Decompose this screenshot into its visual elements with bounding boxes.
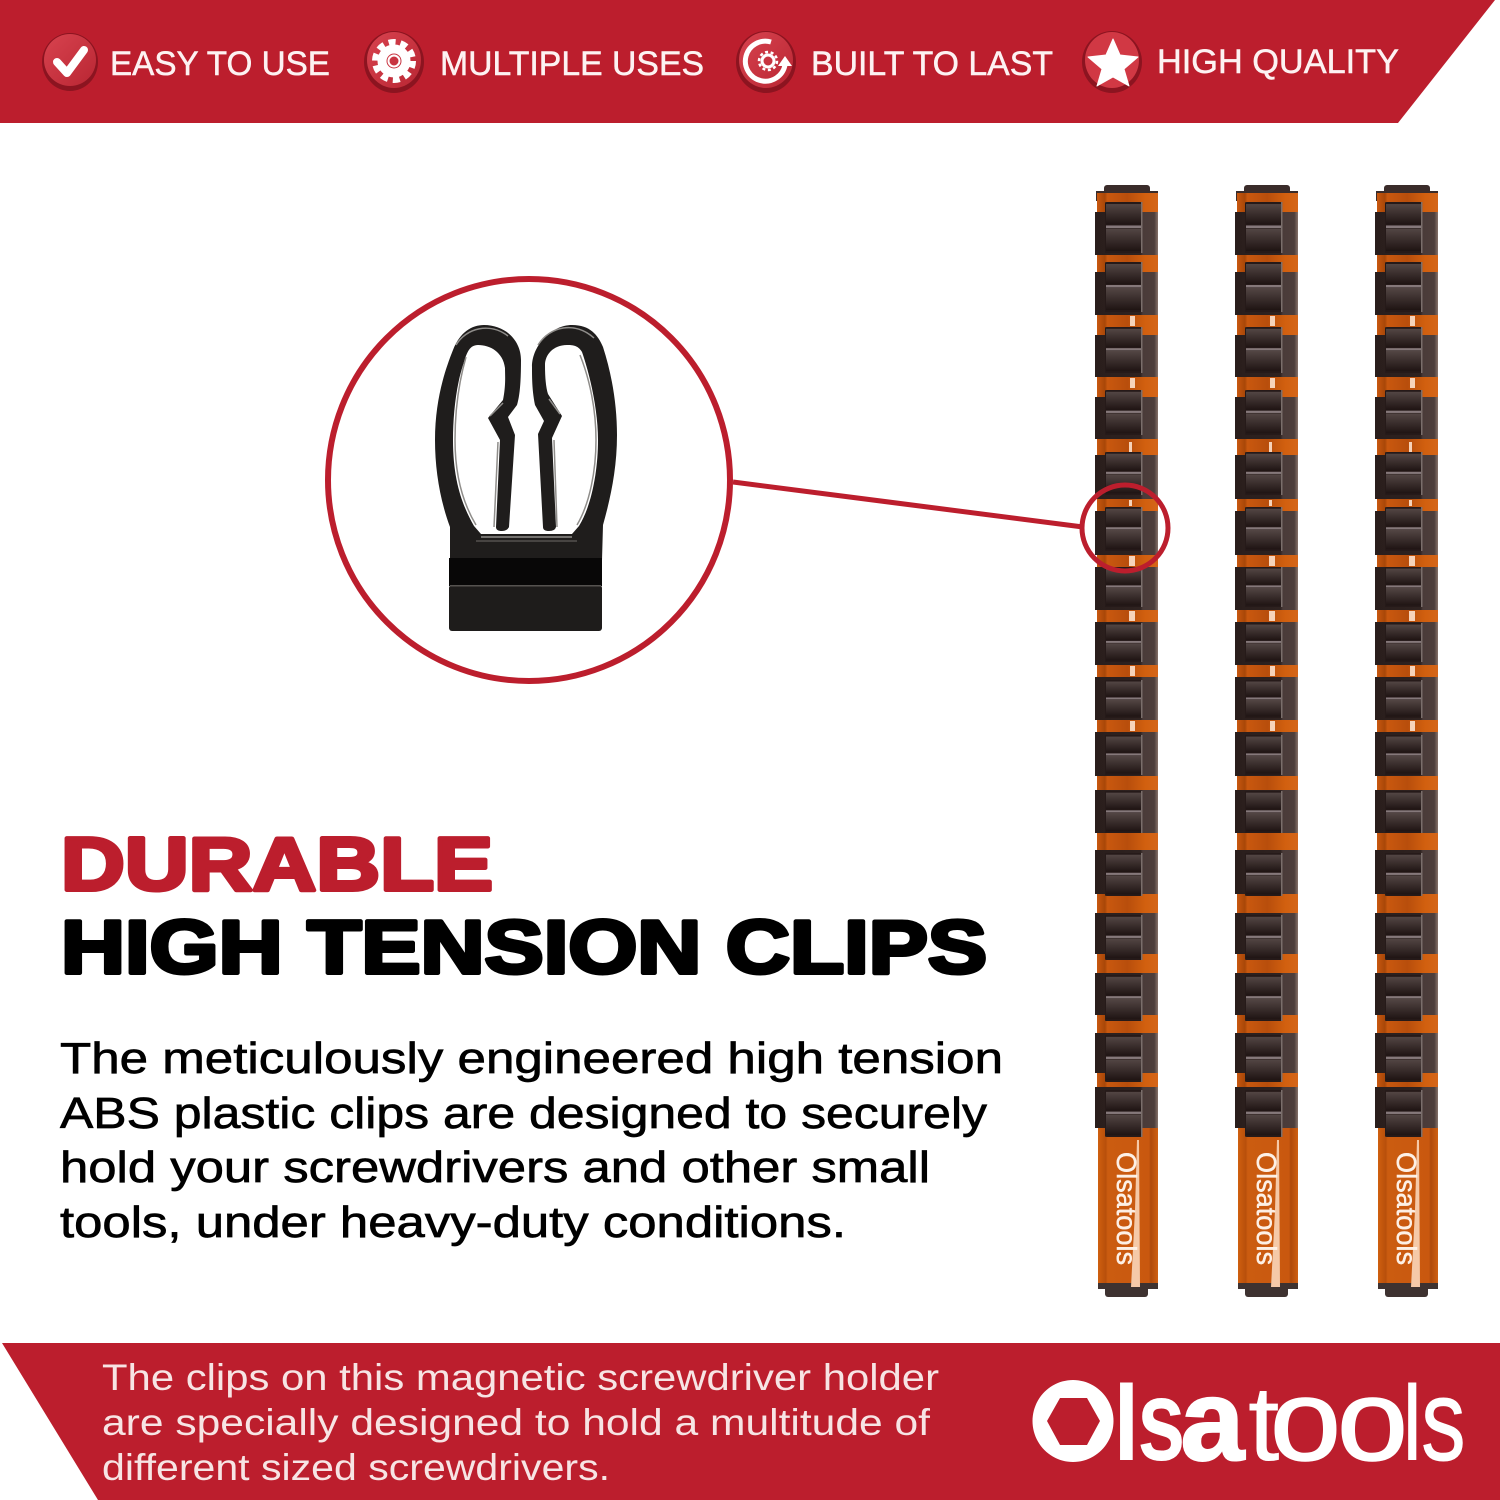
icon: star badge	[1082, 31, 1142, 93]
logo: o	[1337, 1356, 1408, 1485]
top banner	[0, 0, 1495, 123]
label: high quality: HIGH QUALITY	[1157, 43, 1399, 81]
clip close-up callout	[328, 279, 730, 681]
rail brand text: Olsatools	[1251, 1152, 1282, 1265]
bottom banner text: The clips on this magnetic screwdriver holder	[102, 1357, 939, 1398]
label: built to last: BUILT TO LAST	[811, 45, 1053, 83]
icon: black plastic clip	[435, 325, 617, 631]
logo: l	[1114, 1365, 1139, 1484]
rail brand text: Olsatools	[1111, 1152, 1142, 1265]
icon: cycle gear badge	[736, 31, 796, 93]
connector line	[733, 482, 1083, 527]
body text: hold your screwdrivers and other small	[60, 1143, 930, 1192]
label: multiple uses: MULTIPLE USES	[440, 45, 704, 83]
logo: s	[1421, 1356, 1466, 1485]
heading: DURABLE	[61, 822, 493, 906]
label: easy to use: EASY TO USE	[110, 45, 330, 83]
body text: tools, under heavy-duty conditions.	[60, 1198, 846, 1247]
bottom banner text	[102, 1357, 939, 1488]
logo: s	[1137, 1356, 1185, 1485]
heading	[61, 822, 987, 989]
logo: a	[1180, 1357, 1245, 1485]
rail brand text: Olsatools	[1391, 1152, 1422, 1265]
icon: check mark badge	[42, 33, 98, 91]
body text: The meticulously engineered high tension	[60, 1034, 1003, 1083]
logo: o	[1270, 1356, 1341, 1485]
screwdriver holder rail 1	[1095, 185, 1158, 1297]
screwdriver holder rail 2	[1235, 185, 1298, 1297]
icon: gear badge	[364, 31, 424, 93]
body text: ABS plastic clips are designed to securely	[60, 1089, 987, 1138]
heading: HIGH TENSION CLIPS	[61, 905, 987, 989]
body text	[60, 1034, 1003, 1247]
bottom banner text: are specially designed to hold a multitude of	[102, 1402, 931, 1443]
bottom banner	[2, 1343, 1500, 1500]
highlight circle on rail	[1082, 485, 1168, 571]
bottom banner text: different sized screwdrivers.	[102, 1447, 610, 1488]
logo: t	[1248, 1363, 1280, 1483]
logo: l	[1402, 1365, 1422, 1484]
logo	[1033, 1356, 1466, 1485]
screwdriver holder rail 3	[1375, 185, 1438, 1297]
